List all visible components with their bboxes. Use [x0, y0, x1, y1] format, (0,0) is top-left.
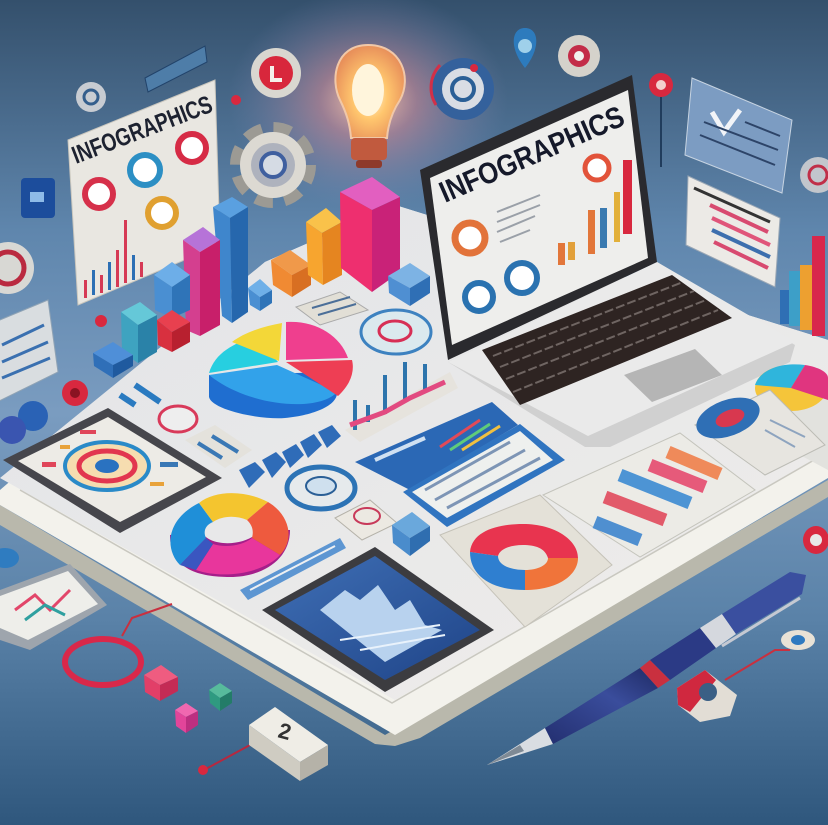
icon: blue balls — [0, 401, 48, 444]
laptop trackpad — [624, 349, 722, 402]
bar: small blue — [93, 342, 133, 378]
laptop keyboard — [482, 275, 732, 405]
icon: left dial — [76, 82, 106, 112]
bar: red — [157, 310, 190, 352]
icon: red ring with lead — [65, 604, 172, 685]
icon: blue sticks — [120, 385, 160, 405]
icon: gear — [237, 129, 309, 201]
pie chart — [209, 322, 353, 418]
lead line — [198, 745, 250, 775]
card: notes near pie — [296, 292, 368, 325]
card: small cube note — [335, 500, 397, 540]
white number cube — [249, 707, 328, 781]
bar: teal — [121, 302, 157, 363]
heading: board title: INFOGRAPHICS — [68, 90, 216, 170]
cube: magenta — [175, 703, 198, 733]
white number cube: 2 — [276, 718, 294, 745]
icon: tag — [145, 46, 207, 92]
right edge bar chart — [780, 236, 825, 336]
icon: light bulb — [335, 45, 405, 168]
icon: red ball — [62, 380, 88, 406]
card: lines beside tablet — [185, 425, 252, 468]
card: striped chart — [543, 433, 755, 557]
floating card: left chart — [0, 300, 58, 403]
platform tray — [0, 205, 828, 746]
heading: laptop title: INFOGRAPHICS — [435, 100, 629, 209]
card: dark blue — [355, 402, 518, 490]
icon: ring near pie — [361, 310, 431, 354]
icon: pin right — [725, 630, 815, 680]
icon: location pin — [514, 28, 536, 68]
icon: red clip right — [803, 526, 828, 554]
icon: small red dots — [95, 64, 478, 327]
floating card: top right note — [685, 78, 792, 193]
laptop base — [448, 262, 795, 447]
edge icons bottom left — [0, 548, 19, 568]
3d bar chart: left group — [93, 197, 272, 378]
3d bar chart: right group — [271, 177, 430, 306]
board bars — [84, 220, 143, 298]
icon: blue square — [21, 178, 55, 218]
small icons near tablet — [0, 380, 252, 468]
small cubes row — [239, 425, 341, 488]
screen bars — [558, 160, 632, 265]
laptop — [420, 75, 795, 447]
icon: round badge — [558, 35, 600, 77]
screen text lines — [497, 195, 540, 242]
floating card: right bars — [686, 176, 780, 287]
bar: small right — [248, 279, 272, 311]
bar: small orange — [271, 250, 311, 297]
small connected cubes — [144, 665, 250, 775]
donut chart card — [440, 495, 612, 627]
laptop screen — [420, 75, 657, 360]
card: light blue border — [403, 424, 565, 527]
icon: blue ring badge — [431, 58, 494, 120]
bar: tall blue — [213, 197, 248, 323]
pie on right card — [755, 364, 828, 470]
icon: red nut — [677, 670, 737, 722]
device: bottom left — [0, 564, 107, 650]
donut chart: left colored — [170, 493, 290, 577]
cube: teal — [209, 683, 232, 711]
bar: orange — [306, 208, 342, 285]
striped strip — [240, 538, 346, 600]
bar: blue top — [154, 262, 190, 318]
board circles — [85, 134, 206, 227]
tablet marks — [42, 430, 178, 486]
mini spike chart — [345, 362, 458, 442]
card: right blue badge — [691, 390, 825, 475]
bar: hot pink — [340, 177, 400, 292]
pen — [487, 572, 806, 765]
floating panel: infographics board — [68, 80, 220, 305]
tablet: left — [3, 408, 222, 533]
screen donuts — [455, 156, 609, 311]
icon: ring marker — [159, 406, 197, 432]
bar: magenta — [183, 227, 220, 336]
cube: pink — [144, 665, 178, 701]
icon: red pin — [649, 73, 673, 167]
floating icons — [0, 28, 828, 327]
cards: center blue pair — [355, 402, 565, 527]
icon: blue cube — [392, 512, 430, 556]
icon: right ring — [800, 157, 828, 193]
icon: red badge — [251, 48, 301, 98]
dial badge — [287, 467, 355, 509]
bar: blue cube — [388, 263, 430, 306]
tablet: bottom center — [262, 547, 494, 692]
icon: left ring — [0, 242, 34, 294]
